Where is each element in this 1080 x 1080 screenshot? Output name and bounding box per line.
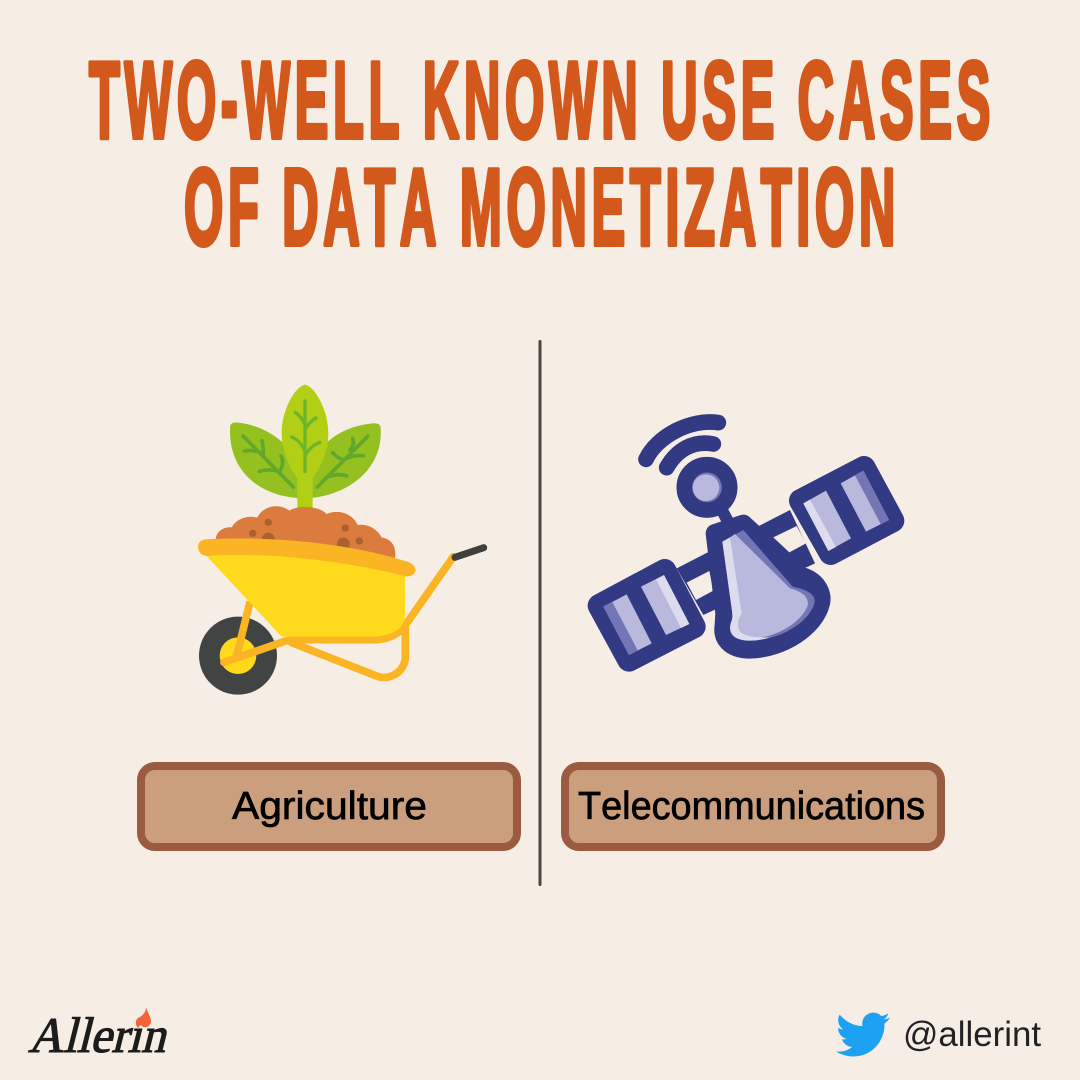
icon: twitter bird [836,1013,890,1056]
center leaf and stem [282,385,328,508]
label: Telecommunications: Telecommunications [578,785,925,828]
side leaf veins [243,436,368,487]
antenna [720,507,732,528]
title [89,40,995,268]
soil spots [249,519,363,550]
frame [224,557,453,677]
satellite dish [715,524,821,649]
body struts [677,510,815,615]
divider [538,340,542,886]
label: Agriculture [141,766,517,847]
logo flame [136,1007,151,1028]
right solar panel [801,468,893,553]
logo: Allerin: Allerin [25,1008,176,1063]
barrow rim [198,538,416,576]
signal arcs [646,422,718,468]
center leaf veins [292,401,320,472]
label: Agriculture: Agriculture [232,785,427,828]
icon: satellite [599,422,893,660]
icon: wheelbarrow with plant [198,385,484,695]
barrow body [206,554,405,637]
wheel [199,617,277,695]
left solar panel [599,571,694,660]
side leaves [230,423,381,498]
handle grip [455,548,484,557]
twitter handle: @allerint [903,1015,1041,1054]
soil [216,506,395,562]
label: Telecommunications [565,766,941,847]
